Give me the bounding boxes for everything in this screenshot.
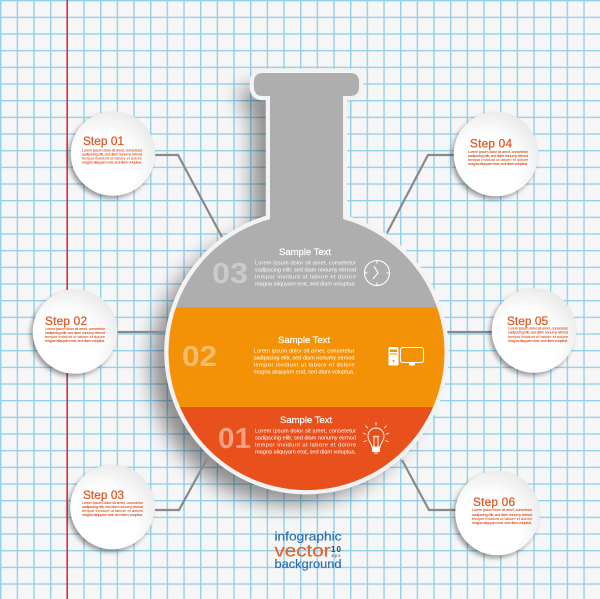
step 06 text: magna aliquyam erat, sed diam voluptua.	[472, 520, 532, 525]
body 01: sadipscing elitr, sed diam nonumy eirmod	[255, 436, 356, 442]
step 03 text: Lorem ipsum dolor sit amet, consetetur	[82, 500, 144, 505]
step 02 disc	[30, 289, 117, 376]
body 02: sadipscing elitr, sed diam nonumy eirmod	[254, 356, 354, 362]
step 05 text: Lorem ipsum dolor sit amet, consetetur	[508, 326, 569, 330]
step 06 heading: Step 06	[473, 495, 515, 509]
step 01 text: sadipscing elitr, sed diam nonumy eirmod	[82, 152, 142, 156]
step 05 heading: Step 05	[507, 314, 548, 328]
body 03: tempor invidunt ut labore et dolore	[255, 274, 356, 280]
body 02	[254, 348, 355, 376]
step 01 disc	[68, 111, 155, 198]
step 06 text	[472, 507, 533, 525]
step 01 text: magna aliquyam erat, sed diam voluptua.	[82, 160, 142, 164]
step 05 disc	[490, 288, 576, 376]
body 03: magna aliquyam erat, sed diam voluptua.	[255, 282, 356, 288]
body 01	[255, 428, 356, 456]
body 01: tempor invidunt ut labore et dolore	[255, 442, 356, 448]
logo: 10 eps: 10	[331, 545, 342, 554]
step 04 disc	[452, 112, 538, 199]
icon: light bulb	[363, 422, 389, 453]
band 03 text	[212, 247, 356, 290]
logo: infographic: infographic	[274, 530, 342, 544]
step 06 text: sadipscing elitr, sed diam nonumy eirmod	[472, 512, 532, 517]
flask outline	[168, 73, 445, 490]
red margin line	[66, 0, 68, 599]
step 04 text: magna aliquyam erat, sed diam voluptua.	[468, 161, 528, 166]
step 03 text	[82, 500, 144, 517]
step 06 text: Lorem ipsum dolor sit amet, consetetur	[472, 507, 533, 512]
step 05 text	[508, 326, 569, 343]
icon: clock	[364, 260, 390, 286]
flask bands	[168, 73, 444, 490]
number 01: 01	[218, 423, 251, 455]
step 03 heading: Step 03	[83, 488, 124, 502]
logo: background: background	[274, 557, 342, 571]
body 02: Lorem ipsum dolor sit amet, consetetur	[254, 348, 355, 354]
step 02 text: tempor invidunt ut labore et dolore	[45, 334, 105, 339]
number 02: 02	[182, 341, 217, 373]
step 04 text: Lorem ipsum dolor sit amet, consetetur	[468, 149, 529, 154]
step 05 text: sadipscing elitr, sed diam nonumy eirmod	[508, 330, 568, 334]
step 02 text: magna aliquyam erat, sed diam voluptua.	[45, 338, 105, 343]
step 04 heading: Step 04	[470, 136, 512, 150]
step 01 text: Lorem ipsum dolor sit amet, consetetur	[82, 148, 143, 152]
logo: eps	[332, 553, 341, 558]
step 04 text	[468, 149, 529, 166]
body 02: tempor invidunt ut labore et dolore	[254, 362, 354, 368]
step 04 text: tempor invidunt ut labore et dolore	[468, 157, 528, 162]
connector lines	[117, 155, 492, 510]
heading 02: Sample Text	[278, 335, 330, 346]
step 02 text	[45, 326, 106, 343]
body 03: Lorem ipsum dolor sit amet, consetetur	[255, 260, 356, 266]
flask shadow	[151, 87, 427, 504]
body 01: magna aliquyam erat, sed diam voluptua.	[255, 450, 356, 456]
step 01 text	[82, 148, 143, 164]
step 05 text: tempor invidunt ut labore et dolore	[508, 334, 568, 339]
step 04 text: sadipscing elitr, sed diam nonumy eirmod	[468, 153, 528, 158]
logo	[274, 530, 342, 571]
step 06 disc	[453, 471, 540, 558]
step 01 heading: Step 01	[83, 134, 124, 148]
step 06 text: tempor invidunt ut labore et dolore	[472, 516, 532, 521]
flask	[160, 60, 460, 502]
step 03 text: magna aliquyam erat, sed diam voluptua.	[82, 512, 143, 517]
logo: vector: vector	[274, 540, 331, 560]
heading 01: Sample Text	[280, 415, 332, 426]
step 02 text: sadipscing elitr, sed diam nonumy eirmod	[45, 330, 105, 335]
band 02 text	[182, 335, 355, 376]
body 03	[255, 260, 356, 288]
step 03 disc	[68, 465, 155, 552]
step 01 text: tempor invidunt ut labore et dolore	[82, 156, 142, 160]
step 03 text: sadipscing elitr, sed diam nonumy eirmod	[82, 504, 143, 509]
icon: computer	[388, 347, 424, 366]
band 01 text	[218, 415, 356, 456]
body 01: Lorem ipsum dolor sit amet, consetetur	[255, 428, 356, 434]
step 03 text: tempor invidunt ut labore et dolore	[82, 508, 143, 513]
heading 03: Sample Text	[279, 247, 331, 258]
step 02 text: Lorem ipsum dolor sit amet, consetetur	[45, 326, 106, 331]
step 02 heading: Step 02	[45, 314, 87, 328]
number 03: 03	[212, 258, 248, 290]
step 05 text: magna aliquyam erat, sed diam voluptua.	[508, 338, 568, 343]
body 02: magna aliquyam erat, sed diam voluptua.	[254, 370, 355, 376]
body 03: sadipscing elitr, sed diam nonumy eirmod	[255, 268, 356, 274]
